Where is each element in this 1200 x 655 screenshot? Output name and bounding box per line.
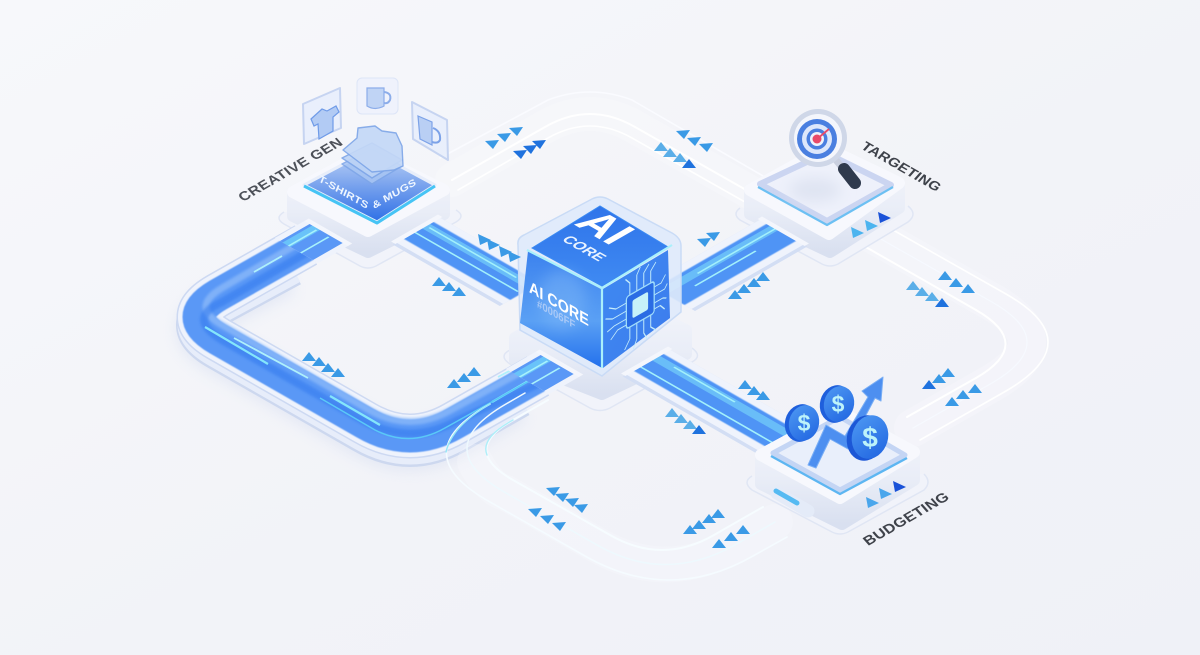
right face xyxy=(603,250,670,368)
pipe glass top xyxy=(199,245,538,436)
label: creative gen: CREATIVE GEN xyxy=(235,135,346,205)
node base: AI core xyxy=(504,290,698,410)
label: targeting: TARGETING xyxy=(857,139,944,195)
tile label: T-SHIRTS xyxy=(317,174,370,212)
glass card: mug side xyxy=(412,102,448,160)
left face text: AI CORE xyxy=(529,277,589,330)
glass shell xyxy=(518,197,681,376)
glass tile xyxy=(773,417,905,490)
socket xyxy=(777,493,808,511)
blue tile xyxy=(304,150,435,222)
icon: coin left: $ xyxy=(798,410,811,436)
AI core cube: CORE xyxy=(558,234,610,264)
tile label xyxy=(317,174,418,212)
pipe highlights xyxy=(205,327,530,425)
label: budgeting: BUDGETING xyxy=(860,490,953,549)
left face xyxy=(520,251,602,368)
thick pipe: creative gen to AI core xyxy=(199,239,538,448)
foot plate xyxy=(504,348,698,410)
icon: circuit chip xyxy=(605,252,667,365)
AI core cube: #0006FF xyxy=(537,298,575,332)
top face xyxy=(532,206,668,286)
node base: targeting xyxy=(736,148,913,266)
tile label: & MUGS xyxy=(371,177,418,211)
icon: coin front: $ xyxy=(862,422,878,453)
foot plate xyxy=(747,474,928,534)
platform body xyxy=(750,148,899,252)
icon: growth arrow xyxy=(808,377,883,468)
icon: coin top xyxy=(816,382,858,426)
pipe: core to budgeting xyxy=(619,346,819,461)
pipe glass lip xyxy=(199,263,518,443)
icon: coin top: $ xyxy=(832,391,845,417)
glass card: mug xyxy=(357,78,398,114)
glass tile xyxy=(760,153,891,221)
flow arrows xyxy=(302,127,982,548)
icon: coin left xyxy=(781,401,823,445)
AI core cube xyxy=(518,197,681,376)
node: budgeting xyxy=(747,377,928,534)
foot plate xyxy=(279,210,461,268)
platform body xyxy=(293,152,444,252)
node top: targeting xyxy=(758,109,893,225)
platform xyxy=(515,290,686,394)
shirt stack xyxy=(342,126,403,184)
pipe: core to targeting xyxy=(646,216,811,311)
foot plate xyxy=(736,206,913,266)
pipe shadow xyxy=(199,272,515,448)
thick pipe socket: creative gen end xyxy=(275,218,352,263)
platform body xyxy=(761,412,914,524)
node top: creative gen xyxy=(303,78,448,223)
icon: coin front xyxy=(842,411,893,465)
glowing edges xyxy=(527,245,672,368)
thin track: top loop xyxy=(440,92,770,202)
icon: magnifier target xyxy=(789,109,855,183)
top text: AI xyxy=(564,205,645,251)
pipe blue core xyxy=(199,245,538,436)
pipe: creative gen to core xyxy=(389,214,548,306)
pipe underside xyxy=(199,264,518,444)
thick pipe socket: AI core end xyxy=(506,350,583,394)
thin track: bottom loop xyxy=(446,393,787,580)
node base: creative gen xyxy=(279,152,461,268)
glass card: t-shirt xyxy=(303,88,341,144)
thin track: right loop xyxy=(850,230,1048,440)
